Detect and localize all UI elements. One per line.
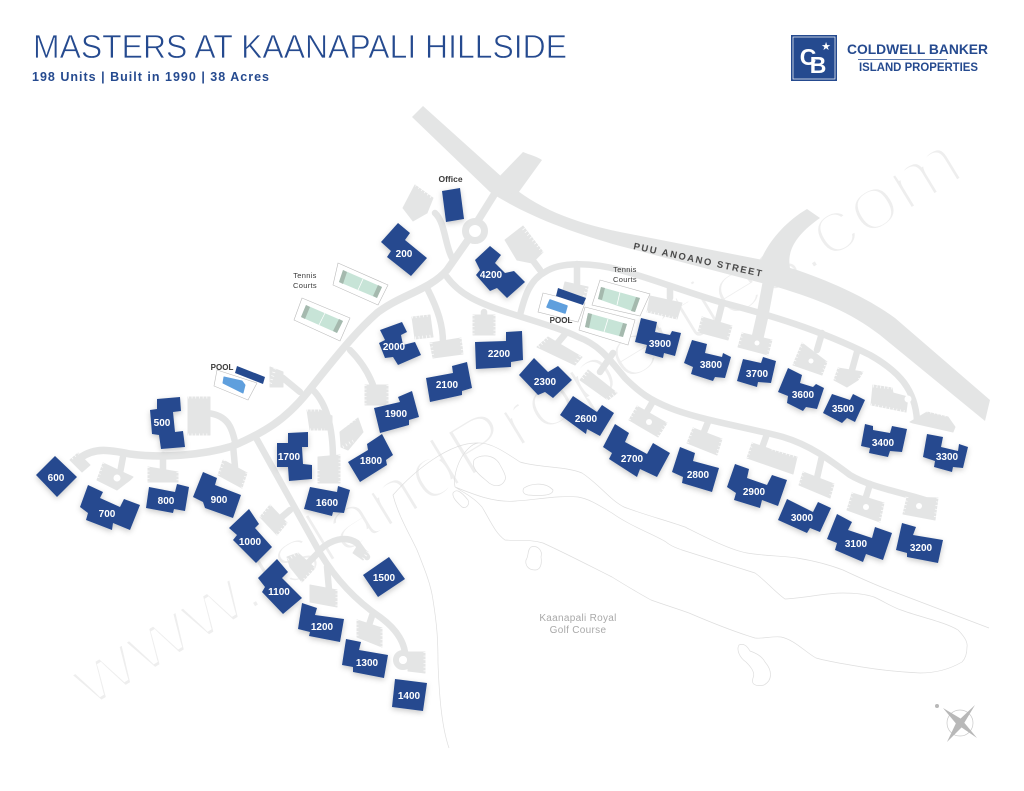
tennis courts: west — [294, 263, 388, 341]
building 2700 — [603, 424, 670, 477]
building 2200 — [475, 331, 523, 369]
building 3200: 3200 — [910, 543, 933, 554]
building 2000: 2000 — [383, 342, 406, 353]
watermark: www.IslandProperties.com — [54, 117, 976, 723]
building 3700 — [737, 357, 776, 387]
building 3200 — [896, 523, 943, 563]
building: office — [442, 188, 464, 222]
building 900: 900 — [211, 495, 228, 506]
logo: Coldwell Banker Island Properties: B — [810, 52, 826, 78]
pool: west — [211, 363, 265, 400]
interior roads — [80, 190, 925, 652]
building 3700: 3700 — [746, 369, 769, 380]
building 1700: 1700 — [278, 452, 301, 463]
building 200: 200 — [396, 249, 413, 260]
building 1400: 1400 — [398, 691, 421, 702]
logo: Coldwell Banker Island Properties: ISLAND PROPERTIES — [859, 60, 978, 74]
building 700: 700 — [99, 509, 116, 520]
building 900 — [193, 472, 241, 518]
tennis label: east: Tennis — [613, 265, 637, 274]
building 2600 — [560, 396, 614, 436]
building 3500: 3500 — [832, 404, 855, 415]
building 2300 — [519, 358, 572, 398]
roundabout — [466, 222, 484, 240]
building 2300: 2300 — [534, 377, 557, 388]
building 500 — [150, 397, 185, 449]
title: MASTERS AT KAANAPALI HILLSIDE — [33, 28, 567, 65]
building 3500 — [823, 394, 865, 423]
building 3000 — [778, 499, 831, 533]
logo: Coldwell Banker Island Properties — [791, 35, 988, 81]
building 2700: 2700 — [621, 454, 644, 465]
building 3100: 3100 — [845, 539, 868, 550]
label: office: Office — [438, 174, 463, 184]
building 500: 500 — [154, 418, 171, 429]
parking areas — [70, 185, 955, 673]
tennis label: west: Tennis — [293, 271, 317, 280]
building 4200: 4200 — [480, 270, 503, 281]
tennis label: west: Courts — [293, 281, 317, 290]
building 1800: 1800 — [360, 456, 383, 467]
logo: Coldwell Banker Island Properties: C — [800, 44, 816, 70]
pool: west: POOL — [211, 363, 233, 372]
building 1000 — [229, 509, 272, 563]
building 2800: 2800 — [687, 470, 710, 481]
building 1600: 1600 — [316, 498, 339, 509]
golf course outlines — [393, 443, 989, 748]
building 2100 — [426, 362, 472, 402]
building 800: 800 — [158, 496, 175, 507]
building 2100: 2100 — [436, 380, 459, 391]
icon: compass — [935, 704, 977, 742]
building 1300 — [342, 639, 388, 678]
building 2600: 2600 — [575, 414, 598, 425]
road: Puu Anoano Street — [412, 106, 990, 421]
building 2900 — [727, 464, 787, 508]
building 200 — [381, 223, 427, 276]
building 1800 — [348, 434, 393, 482]
building 1200: 1200 — [311, 622, 334, 633]
street name: PUU ANOANO STREET — [632, 241, 764, 280]
building 600 — [36, 456, 77, 497]
building 1600 — [304, 486, 350, 516]
building 1100: 1100 — [268, 587, 290, 598]
building 2900: 2900 — [743, 487, 766, 498]
building 1700 — [277, 432, 312, 481]
building 3600: 3600 — [792, 390, 815, 401]
building 3800: 3800 — [700, 360, 723, 371]
building 2000 — [379, 322, 421, 365]
logo: Coldwell Banker Island Properties: ★ — [821, 41, 831, 53]
building 700 — [80, 485, 140, 530]
building 2200: 2200 — [488, 349, 511, 360]
building 4200 — [475, 246, 525, 298]
building 2800 — [672, 447, 719, 492]
tennis courts: east — [579, 280, 650, 345]
building 1100 — [258, 559, 302, 614]
golf course label: Kaanapali Royal — [539, 613, 617, 624]
tennis label: east — [613, 265, 637, 284]
building 3400 — [861, 424, 907, 457]
building 3000: 3000 — [791, 513, 814, 524]
subtitle: 198 Units | Built in 1990 | 38 Acres — [32, 70, 269, 84]
building 3900 — [635, 318, 681, 358]
building 600: 600 — [48, 473, 65, 484]
tennis label: west — [293, 271, 317, 290]
golf course label: Golf Course — [550, 625, 606, 636]
building 3600 — [778, 368, 824, 411]
building 1900: 1900 — [385, 409, 408, 420]
building 3400: 3400 — [872, 438, 895, 449]
building 1300: 1300 — [356, 658, 379, 669]
building 800 — [146, 484, 189, 513]
building 3900: 3900 — [649, 339, 672, 350]
building 1000: 1000 — [239, 537, 262, 548]
tennis label: east: Courts — [613, 275, 637, 284]
pool: east: POOL — [550, 316, 572, 325]
logo: Coldwell Banker Island Properties: COLDWELL BANKER — [847, 41, 988, 57]
building 1500: 1500 — [373, 573, 396, 584]
golf course label — [539, 613, 617, 636]
building 1900 — [374, 391, 419, 433]
building 3100 — [827, 514, 892, 562]
building 3300: 3300 — [936, 452, 959, 463]
pool: east — [538, 288, 586, 325]
building 1500 — [363, 557, 405, 597]
building 1400 — [392, 679, 427, 711]
building 1200 — [298, 603, 344, 642]
building 3800 — [684, 340, 731, 381]
building 3300 — [923, 434, 968, 472]
